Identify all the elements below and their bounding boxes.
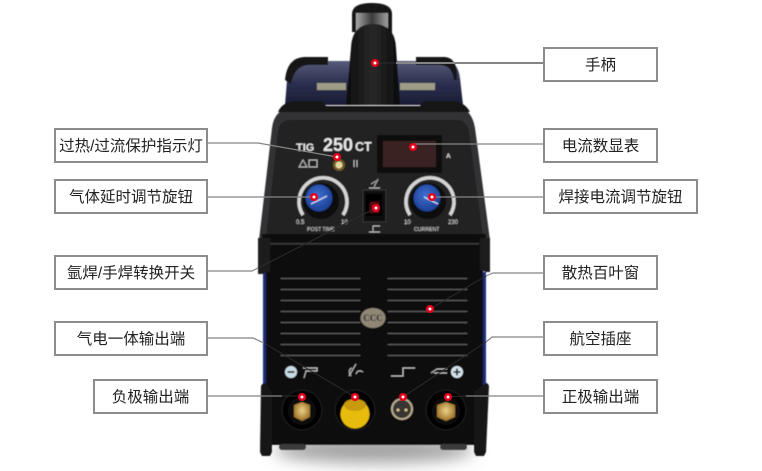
- handle rear loop: [352, 3, 392, 34]
- CCC sticker: CCC: [363, 313, 383, 323]
- marker: gas knob: [310, 193, 318, 201]
- welding current knob: 10: [404, 220, 411, 226]
- label: welding current knob: 焊接电流调节旋钮: [558, 189, 682, 206]
- minus sign: [285, 366, 297, 378]
- marker: gas-electric: [351, 393, 359, 401]
- torch symbol: [303, 368, 317, 378]
- marker: handle: [371, 59, 379, 67]
- upper side brackets: [258, 238, 270, 274]
- label: overheat lamp: [54, 128, 208, 163]
- label: mode switch: [54, 255, 208, 290]
- label: handle: [543, 47, 658, 82]
- leader lines outside the machine: [208, 63, 543, 396]
- right vent louvres: [388, 278, 467, 356]
- gas delay knob: 10: [341, 220, 348, 226]
- lower side brackets: [260, 383, 272, 456]
- label: overheat lamp: 过热/过流保护指示灯: [59, 138, 203, 155]
- positive output terminal: [426, 390, 466, 430]
- digital display: [377, 135, 451, 173]
- front bezel: [259, 106, 490, 240]
- label: aviation socket: 航空插座: [569, 331, 632, 348]
- welding current knob: 230: [448, 220, 459, 226]
- plus sign: [451, 366, 463, 378]
- overheat indicator lamp: [333, 159, 345, 171]
- floor shadow: [274, 437, 474, 463]
- CCC sticker: [360, 308, 386, 328]
- gas-electric output terminal: [335, 390, 375, 430]
- gas delay knob: POST TIME: [307, 227, 335, 233]
- blue top cover: [285, 61, 463, 105]
- marker: display: [409, 143, 417, 151]
- electrode symbol: [431, 369, 447, 373]
- negative output terminal: [282, 390, 322, 430]
- machine body: [258, 3, 490, 463]
- warning icons: [299, 160, 357, 167]
- model label: TIG: [296, 142, 314, 154]
- left vent louvres: [281, 278, 360, 356]
- aviation socket: [388, 395, 416, 423]
- label: gas delay knob: 气体延时调节旋钮: [69, 189, 193, 206]
- label: positive output: [543, 379, 658, 414]
- marker: switch: [372, 204, 380, 212]
- label: current display: [543, 128, 658, 163]
- label: gas-electric output: 气电一体输出端: [77, 331, 185, 348]
- model label: 250: [323, 135, 353, 155]
- lower black front: [266, 237, 483, 445]
- label: negative output: [93, 379, 208, 414]
- label: negative output: 负极输出端: [112, 389, 189, 406]
- arc symbol: [349, 364, 363, 376]
- connector symbol: [391, 368, 415, 376]
- gas delay knob: 0.5: [296, 220, 305, 226]
- marker: negative: [298, 393, 306, 401]
- digital display: A: [446, 153, 451, 160]
- label: handle: 手柄: [585, 57, 616, 74]
- model label: [296, 135, 372, 155]
- leader lines over the dark machine: [258, 63, 486, 397]
- label: mode switch: 氩焊/手焊转换开关: [67, 265, 195, 282]
- marker: vent: [426, 305, 434, 313]
- label: louvres: [543, 255, 658, 290]
- label: gas delay knob: [54, 179, 208, 214]
- marker: positive: [444, 393, 452, 401]
- top corner brackets: [285, 57, 328, 84]
- mode switch: [363, 179, 386, 232]
- model label: CT: [355, 140, 372, 154]
- marker: aviation: [399, 393, 407, 401]
- feet: [279, 444, 467, 450]
- rating plates: [317, 83, 346, 90]
- label: positive output: 正极输出端: [562, 389, 639, 406]
- label: welding current knob: [543, 179, 698, 214]
- label: aviation socket: [543, 321, 658, 356]
- marker: current knob: [428, 193, 436, 201]
- control panel: [266, 120, 483, 237]
- label: gas-electric output: [54, 321, 208, 356]
- marker: lamp: [333, 153, 341, 161]
- front handle: [346, 24, 400, 105]
- blue side strips: [263, 272, 267, 386]
- welding current knob: CURRENT: [414, 227, 440, 233]
- label: louvres: 散热百叶窗: [562, 265, 639, 282]
- welding current knob: [404, 178, 459, 233]
- red marker dots: [298, 59, 452, 401]
- bezel top band: [278, 101, 470, 112]
- label: current display: 电流数显表: [562, 138, 639, 155]
- gas delay knob: [296, 178, 348, 233]
